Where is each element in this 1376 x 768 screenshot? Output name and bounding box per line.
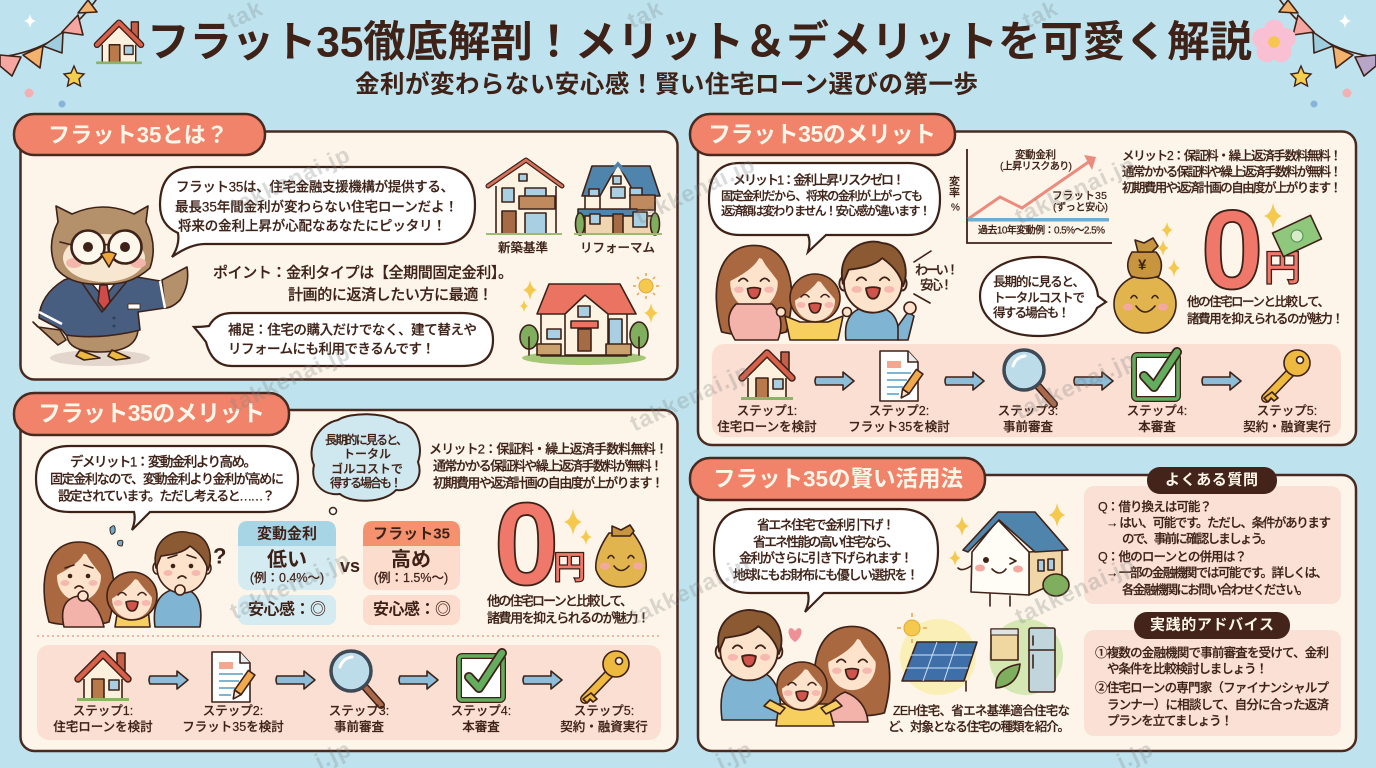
step 4: 本審査 xyxy=(1138,419,1176,434)
family: 喜ぶ家族 xyxy=(716,242,931,340)
heading pill: よくある質問 xyxy=(1165,472,1258,488)
family: 笑顔の家族 xyxy=(716,610,890,726)
point text xyxy=(213,264,513,304)
speech bubble: 補足: 補足：住宅の購入だけでなく、建て替えや xyxy=(228,322,477,338)
heading pill: 実践的アドバイス xyxy=(1150,616,1274,634)
card: よくある質問: Q：借り換えは可能？ xyxy=(1098,499,1212,514)
arrow xyxy=(523,671,562,689)
label: 新築: 新築基準 xyxy=(498,240,548,255)
speech bubble: 補足: リフォームにも利用できるんです！ xyxy=(228,342,435,356)
family: 悩む家族: ? xyxy=(213,544,226,568)
speech bubble: 長期的に: 長期的に見ると、 xyxy=(993,274,1085,289)
thought cloud: ゴルコストで xyxy=(331,461,403,476)
speech bubble: デメリット1: 設定されています。ただし考えると……？ xyxy=(58,488,275,504)
comparison card: フラット35: 高め xyxy=(391,548,431,571)
speech bubble: デメリット1 xyxy=(36,446,298,530)
icon: flower xyxy=(1252,20,1296,62)
bunting right xyxy=(1279,0,1376,108)
arrow xyxy=(399,671,438,689)
text: メリット2: 通常かかる保証料や繰上返済手数料が無料！ xyxy=(1122,164,1342,179)
step 1: 住宅ローンを検討 xyxy=(53,719,153,734)
speech bubble: メリット1: 固定金利だから、将来の金利が上がっても xyxy=(721,188,923,203)
step 1: 住宅ローンを検討 xyxy=(717,419,817,434)
bunting left xyxy=(0,0,97,108)
exclamation: わーい: 安心！ xyxy=(920,278,953,292)
card: 実践的アドバイス: ②住宅ローンの専門家（ファイナンシャルプ xyxy=(1095,680,1329,695)
speech bubble: メリット1: 返済額は変わりません！安心感が違います！ xyxy=(721,203,931,218)
icon: solar panel xyxy=(897,613,977,695)
step 4: ステップ4: xyxy=(1127,404,1187,418)
step 5: 契約・融資実行 xyxy=(560,719,648,734)
speech bubble: 補足 xyxy=(194,313,493,366)
step 3: ステップ3: xyxy=(998,404,1058,418)
step 5 xyxy=(560,651,648,734)
step 2 xyxy=(182,652,284,734)
icon: money bag xyxy=(596,525,646,587)
caption: 諸費用 xyxy=(487,594,650,626)
caption: 諸費用: 他の住宅ローンと比較して、 xyxy=(1187,294,1330,309)
icon: appliances xyxy=(989,619,1063,695)
speech bubble: 長期的に: トータルコストで xyxy=(993,291,1085,305)
card: よくある質問: ので、事前に確認しましょう。 xyxy=(1122,531,1273,546)
text: メリット2: メリット2：保証料・繰上返済手数料無料！ xyxy=(1122,148,1342,163)
card: よくある質問: → はい、可能です。ただし、条件があります xyxy=(1106,515,1331,530)
icon: banknote xyxy=(1272,215,1322,257)
step 3: 事前審査 xyxy=(334,719,384,734)
big 0円: 0 xyxy=(494,478,559,610)
watermarks: takkenai.jp xyxy=(226,546,354,624)
icon: title house xyxy=(96,22,142,64)
tab heading xyxy=(14,393,289,435)
speech bubble: 説明: 将来の金利上昇が心配なあなたにピッタリ！ xyxy=(178,218,446,234)
step 5 xyxy=(1243,350,1331,434)
text: メリット2: メリット2：保証料・繰上返済手数料無料！ xyxy=(429,442,668,456)
comparison card: 変動金利 xyxy=(238,521,336,625)
speech bubble: 説明: 最長35年間金利が変わらない住宅ローンだよ！ xyxy=(175,198,458,214)
icon: money bag: ¥ xyxy=(1138,256,1147,274)
tab heading: フラット35の賢い活用法 xyxy=(713,466,963,492)
step 4 xyxy=(451,653,511,734)
caption: ZEH住宅: ZEH住宅、省エネ基準適合住宅な xyxy=(893,703,1070,718)
point text: ポイント：金利タイプは【全期間固定金利】。 xyxy=(213,264,513,282)
text: メリット2: 初期費用や返済計画の自由度が上がります！ xyxy=(1122,180,1342,195)
tab heading xyxy=(14,114,265,155)
step 3: ステップ3: xyxy=(329,704,389,718)
speech bubble: 省エネ住宅: 地球にもお財布にも優しい選択を！ xyxy=(733,568,919,582)
big 0円: 0 xyxy=(1201,188,1263,312)
exclamation: わーい xyxy=(915,262,959,292)
caption: 諸費用: 諸費用を抑えられるのが魅力！ xyxy=(1187,311,1344,326)
tab heading xyxy=(690,458,985,500)
watermarks: takkenai.jp xyxy=(626,551,754,629)
family: 悩む家族 xyxy=(44,526,226,627)
chart: 金利の推移: (ずっと安心) xyxy=(1053,200,1108,214)
card: よくある質問: Q：他のローンとの併用は？ xyxy=(1098,549,1247,564)
house: 赤い屋根の家 xyxy=(520,273,659,365)
step 3 xyxy=(329,651,389,734)
tab heading: フラット35とは？ xyxy=(48,122,228,148)
owl mascot xyxy=(33,206,188,366)
icon: sparkle xyxy=(1264,203,1282,229)
card: よくある質問: 各金融機関にお問い合わせください。 xyxy=(1122,582,1309,597)
card: 実践的アドバイス xyxy=(1084,612,1341,736)
text: メリット2: 初期費用や返済計画の自由度が上がります！ xyxy=(433,476,664,490)
house: リフォーム xyxy=(574,164,662,235)
card: よくある質問: → 一部の金融機関では可能です。詳しくは、 xyxy=(1106,565,1328,580)
watermarks: takkenai.jp xyxy=(226,339,354,417)
heading pill xyxy=(1134,612,1290,639)
big 0円 xyxy=(1201,188,1301,312)
tab heading: フラット35のメリット xyxy=(708,121,936,147)
step 1: ステップ1: xyxy=(73,704,133,718)
step 2: フラット35を検討 xyxy=(848,419,950,434)
icon: money bag xyxy=(1114,222,1180,333)
arrow xyxy=(1202,372,1241,390)
step flow xyxy=(37,645,661,740)
big 0円: 円 xyxy=(1264,248,1301,288)
step 2 xyxy=(848,351,950,434)
thought cloud: 長期的に見ると、 xyxy=(325,432,408,447)
step 5: ステップ5: xyxy=(574,704,634,718)
chart: 金利の推移: 変動金利 xyxy=(1015,148,1056,161)
speech bubble: 説明: フラット35は、住宅金融支援機構が提供する、 xyxy=(176,178,454,194)
panel: フラット35とは xyxy=(14,114,678,380)
text: メリット2: 通常かかる保証料や繰上返済手数料が無料！ xyxy=(433,458,663,474)
text: メリット2 xyxy=(429,442,668,490)
caption: 諸費用 xyxy=(1187,294,1344,326)
card: よくある質問 xyxy=(1084,467,1341,604)
step 2: ステップ2: xyxy=(203,704,263,718)
step 3 xyxy=(998,350,1058,434)
watermarks: takkenai.jp xyxy=(1011,346,1139,424)
step 1 xyxy=(53,653,153,734)
watermarks: takkenai.jp xyxy=(631,151,759,229)
comparison card: 変動金利: 低い xyxy=(267,548,307,571)
comparison card: 変動金利: (例：0.4%～) xyxy=(250,571,324,585)
subtitle: 金利が変わらない安心感！賢い住宅ローン選びの第一歩 xyxy=(355,70,978,98)
step flow xyxy=(712,344,1341,437)
arrow xyxy=(149,671,188,689)
big 0円: 円 xyxy=(553,548,586,586)
thought cloud: トータル xyxy=(343,447,391,461)
comparison card: 変動金利: 安心感：◎ xyxy=(248,600,326,618)
watermarks: takkenai.jp xyxy=(626,358,754,436)
arrow xyxy=(276,671,315,689)
step 5: ステップ5: xyxy=(1257,404,1317,418)
step 4 xyxy=(1127,352,1187,434)
text: メリット2 xyxy=(1122,148,1342,195)
card: 実践的アドバイス: ①複数の金融機関で事前審査を受けて、金利 xyxy=(1095,645,1329,660)
chart: 金利の推移: 率 xyxy=(949,186,960,199)
card: 実践的アドバイス: プランを立てましょう！ xyxy=(1107,714,1233,728)
card: 実践的アドバイス: ランナー）に相談して、自分に合った返済 xyxy=(1107,697,1329,712)
speech bubble: 説明 xyxy=(160,167,475,257)
speech bubble: 省エネ住宅: 省エネ住宅で金利引下げ！ xyxy=(757,518,895,532)
label: vs: vs xyxy=(340,556,360,576)
heading pill xyxy=(1147,467,1277,494)
thought cloud xyxy=(311,414,420,514)
tab heading: フラット35のメリット xyxy=(38,400,265,426)
speech bubble: 長期的に xyxy=(980,257,1106,336)
house character xyxy=(949,503,1069,606)
chart: 金利の推移: 変 xyxy=(949,174,960,188)
speech bubble: 省エネ住宅: 金利がさらに引き下げられます！ xyxy=(739,550,913,566)
house: 新築 xyxy=(486,160,562,235)
arrow xyxy=(1074,372,1113,390)
chart: 金利の推移: % xyxy=(951,202,960,214)
chart: 金利の推移: フラット35 xyxy=(1052,190,1107,202)
watermarks xyxy=(223,0,1157,768)
step 5: 契約・融資実行 xyxy=(1243,419,1331,434)
caption: ZEH住宅 xyxy=(888,703,1070,734)
step 2: ステップ2: xyxy=(869,404,929,418)
comparison card: フラット35: (例：1.5%～) xyxy=(374,571,448,585)
watermarks: takkenai.jp xyxy=(1011,551,1139,629)
arrow xyxy=(945,372,984,390)
point text: 計画的に返済したい方に最適！ xyxy=(288,286,493,304)
comparison card: 変動金利: 変動金利 xyxy=(257,524,317,542)
card: 実践的アドバイス: や条件を比較検討しましょう！ xyxy=(1107,661,1268,676)
speech bubble: 省エネ住宅: 省エネ性能の高い住宅なら、 xyxy=(753,534,899,550)
thought cloud: 得する場合も！ xyxy=(330,475,402,490)
tab heading xyxy=(690,114,955,155)
caption: 諸費用: 諸費用を抑えられるのが魅力！ xyxy=(487,610,650,626)
speech bubble: 省エネ住宅 xyxy=(714,509,938,612)
chart: 金利の推移 xyxy=(949,148,1112,243)
caption: 諸費用: 他の住宅ローンと比較して、 xyxy=(487,594,633,608)
big 0円 xyxy=(494,478,592,610)
speech bubble: メリット1 xyxy=(709,163,940,252)
watermarks: takkenai.jp xyxy=(226,141,354,219)
exclamation: わーい: わーい！ xyxy=(915,262,959,278)
step 1 xyxy=(717,352,817,434)
step 4: 本審査 xyxy=(462,719,500,734)
step 2: フラット35を検討 xyxy=(182,719,284,734)
panel: フラット35のメリット（右上） xyxy=(690,114,1356,445)
step 3: 事前審査 xyxy=(1003,419,1053,434)
speech bubble: 長期的に: 得する場合も！ xyxy=(993,305,1070,320)
speech bubble: メリット1: メリット1：金利上昇リスクゼロ！ xyxy=(733,172,905,188)
panel: フラット35のメリット（左下・デメリット） xyxy=(14,393,678,751)
chart: 金利の推移: 過去10年変動例：0.5%～2.5% xyxy=(978,224,1105,236)
comparison card: フラット35 xyxy=(363,521,460,625)
comparison card: フラット35: 安心感：◎ xyxy=(373,600,451,618)
title: フラット35徹底解剖！メリット＆デメリットを可愛く解説 xyxy=(147,18,1252,66)
speech bubble: デメリット1: デメリット1：変動金利より高め。 xyxy=(70,454,257,470)
caption: ZEH住宅: ど、対象となる住宅の種類を紹介。 xyxy=(888,719,1070,734)
watermarks: takkenai.jp xyxy=(1011,151,1139,229)
label: リフォーム: リフォーマム xyxy=(580,241,655,255)
speech bubble: デメリット1: 固定金利なので、変動金利より金利が高めに xyxy=(50,472,284,486)
step 4: ステップ4: xyxy=(451,704,511,718)
step 1: ステップ1: xyxy=(737,404,797,418)
panel: フラット35の賢い活用法 xyxy=(690,458,1356,751)
arrow xyxy=(815,372,854,390)
comparison card: フラット35: フラット35 xyxy=(373,526,450,542)
chart: 金利の推移: (上昇リスクあり) xyxy=(1000,160,1072,172)
